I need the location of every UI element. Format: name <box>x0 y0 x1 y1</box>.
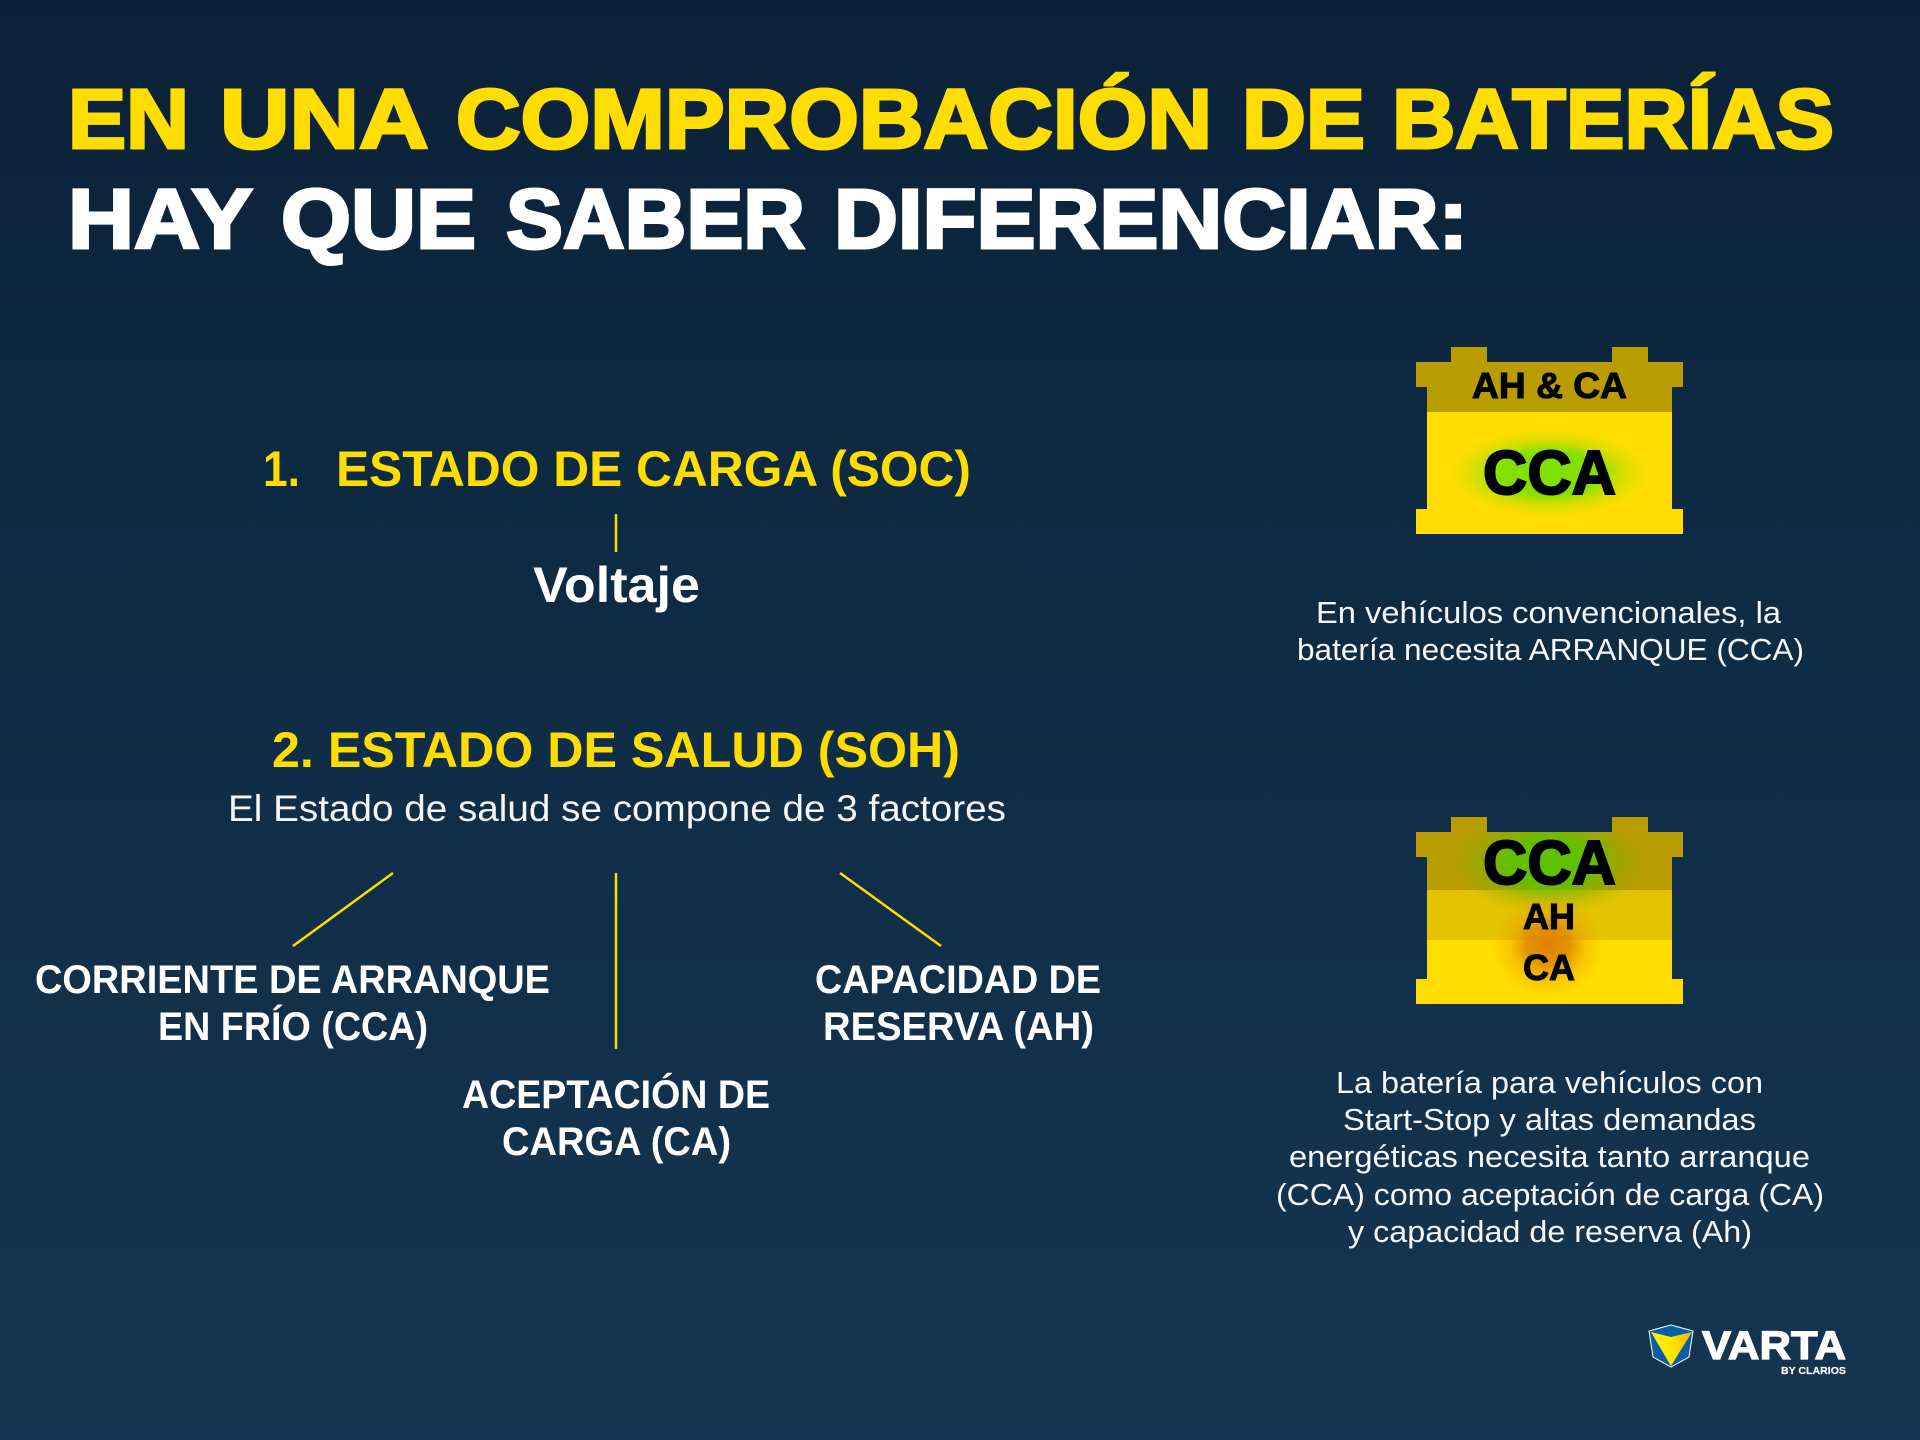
icon: conventional battery: AH & CA <box>1472 365 1627 406</box>
heading: estado de carga: 1. <box>263 441 300 497</box>
factor: corriente de arranque <box>35 958 550 1049</box>
factor: corriente de arranque: CORRIENTE DE ARRANQUE <box>35 958 550 1002</box>
factor: capacidad de reserva: CAPACIDAD DE <box>815 958 1101 1002</box>
text: start-stop vehicles: y capacidad de reserva (Ah) <box>1348 1215 1752 1249</box>
text: start-stop vehicles: energéticas necesita tanto arranque <box>1289 1140 1810 1174</box>
icon: varta shield <box>1649 1325 1693 1367</box>
heading: estado de salud: 2. ESTADO DE SALUD (SOH) <box>272 722 960 778</box>
label: voltaje: Voltaje <box>533 557 700 613</box>
text: conventional vehicles: batería necesita ARRANQUE (CCA) <box>1297 633 1804 667</box>
text: conventional vehicles <box>1297 596 1804 667</box>
text: start-stop vehicles: La batería para vehículos con <box>1336 1066 1763 1100</box>
text: start-stop vehicles: (CCA) como aceptación de carga (CA) <box>1276 1178 1824 1212</box>
factor: aceptacion de carga: ACEPTACIÓN DE <box>462 1071 770 1117</box>
wordmark: varta: VARTA <box>1702 1324 1846 1368</box>
factor: aceptacion de carga <box>462 1071 770 1164</box>
heading: estado de carga: ESTADO DE CARGA (SOC) <box>336 441 971 497</box>
text: conventional vehicles: En vehículos convencionales, la <box>1316 596 1781 630</box>
title: COMPROBACIÓN <box>456 72 1212 166</box>
factor: capacidad de reserva: RESERVA (AH) <box>823 1005 1094 1049</box>
icon: start-stop battery: CA <box>1523 947 1575 988</box>
title: EN <box>68 72 189 166</box>
icon: start-stop battery <box>1416 810 1683 1004</box>
title: UNA <box>220 72 427 166</box>
subtitle: tres factores: El Estado de salud se compone de 3 factores <box>228 788 1006 829</box>
icon: conventional battery <box>1416 347 1683 534</box>
text: start-stop vehicles <box>1276 1066 1824 1249</box>
section 1: estado de carga <box>263 441 971 613</box>
title <box>68 72 1834 266</box>
title: HAY <box>68 172 252 266</box>
factor: capacidad de reserva <box>815 958 1101 1049</box>
title: QUE <box>281 172 476 266</box>
title: DIFERENCIAR: <box>834 172 1468 266</box>
factor: corriente de arranque: EN FRÍO (CCA) <box>158 1004 428 1049</box>
connector line to voltaje <box>615 514 617 552</box>
title: DE <box>1242 72 1365 166</box>
section 2: estado de salud <box>35 722 1101 1164</box>
wordmark: by clarios: BY CLARIOS <box>1781 1365 1846 1377</box>
icon: conventional battery: CCA <box>1483 439 1616 508</box>
title: SABER <box>506 172 805 266</box>
logo: varta <box>1649 1324 1846 1377</box>
title: BATERÍAS <box>1392 72 1834 166</box>
factor: aceptacion de carga: CARGA (CA) <box>502 1120 731 1164</box>
icon: start-stop battery: CCA <box>1483 829 1616 898</box>
text: start-stop vehicles: Start-Stop y altas demandas <box>1343 1103 1756 1137</box>
connector lines to factors <box>293 873 941 1049</box>
icon: start-stop battery: AH <box>1523 896 1575 937</box>
